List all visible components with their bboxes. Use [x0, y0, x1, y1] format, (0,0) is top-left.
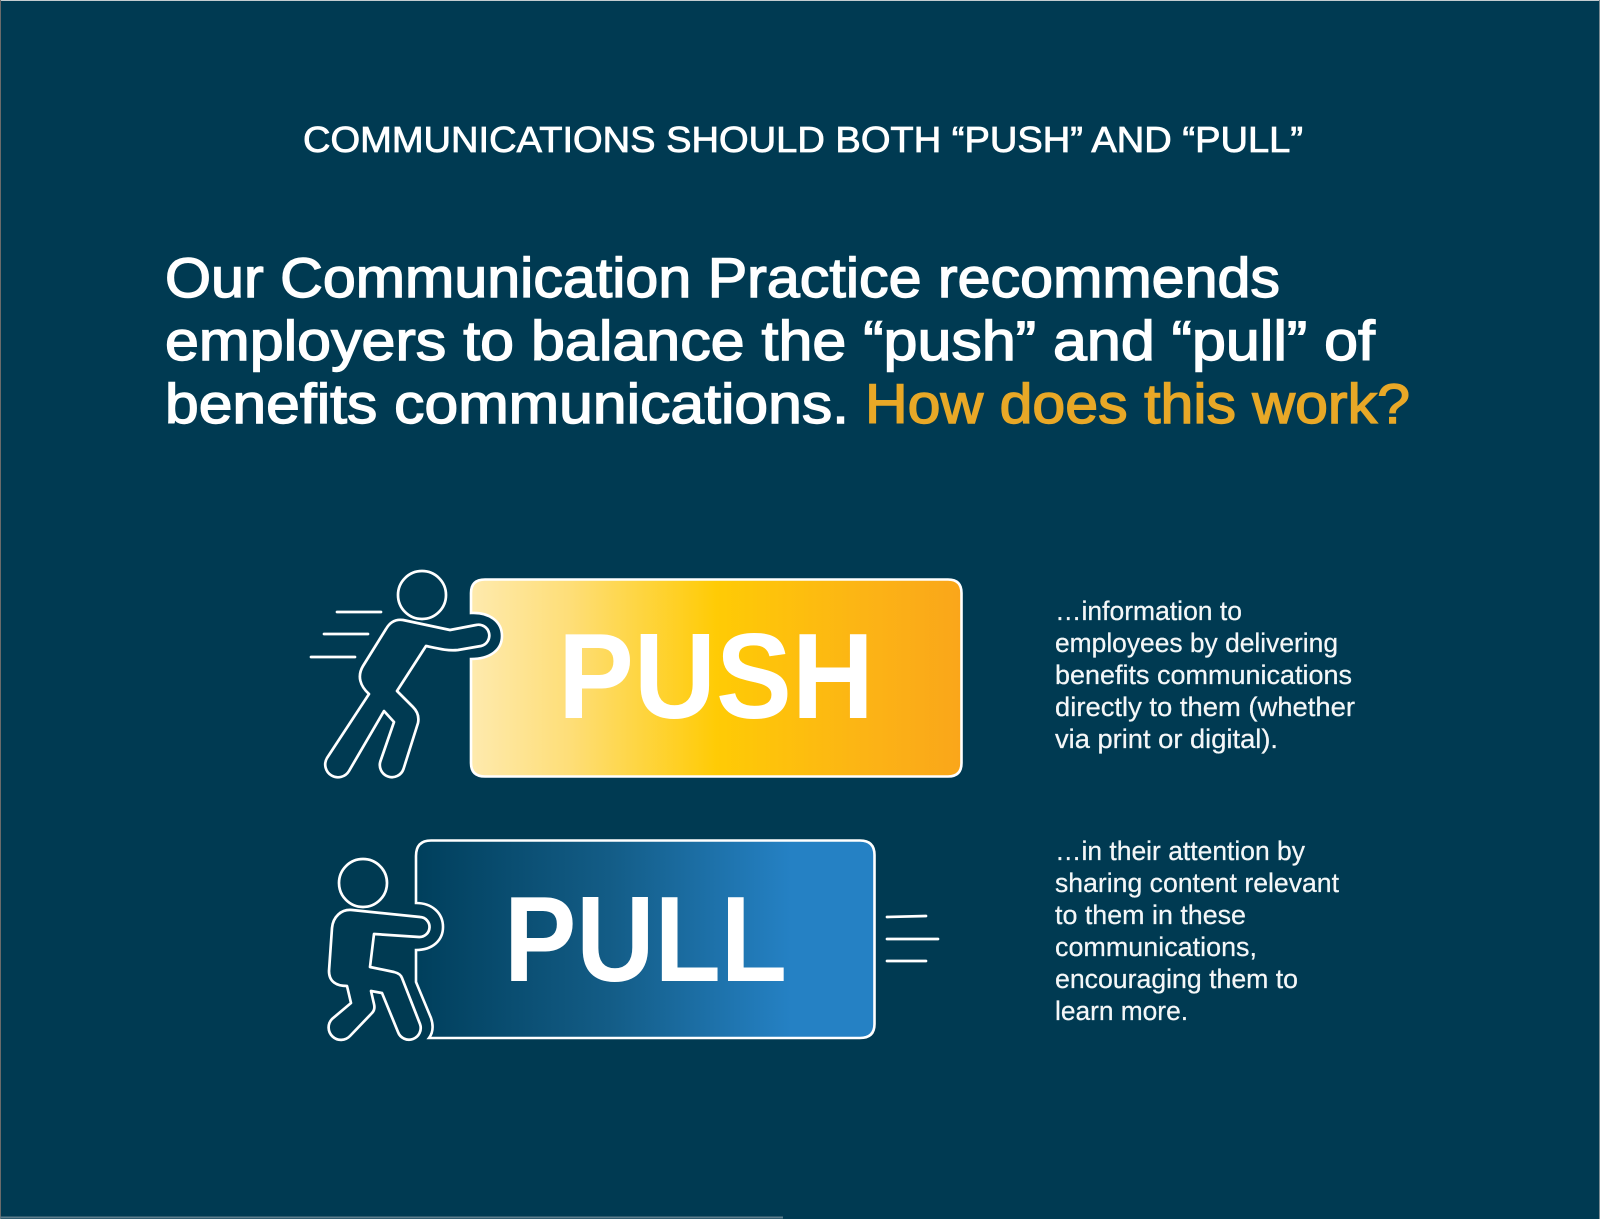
heading highlight: question: How does this work? — [865, 372, 1410, 435]
push label: PUSH — [558, 608, 874, 744]
pull button — [416, 840, 874, 1038]
push button — [471, 580, 962, 776]
push description: via print or digital). — [1055, 724, 1278, 754]
panel: pull — [329, 836, 1339, 1040]
pull description — [1055, 836, 1339, 1026]
icon: speed lines beside pull button — [887, 916, 938, 961]
push description: employees by delivering — [1055, 628, 1338, 658]
heading: recommendation: employers to balance the “push” and “pull” of — [165, 309, 1375, 372]
pull description: to them in these — [1055, 900, 1246, 930]
push description: directly to them (whether — [1055, 692, 1355, 722]
pull description: sharing content relevant — [1055, 868, 1339, 898]
push description: benefits communications — [1055, 660, 1352, 690]
pull description: learn more. — [1055, 996, 1188, 1026]
pull description: …in their attention by — [1055, 836, 1305, 866]
icon: pushing figure — [325, 571, 489, 777]
panel: push — [311, 571, 1355, 777]
heading: recommendation: benefits communications. — [165, 372, 849, 435]
icon: speed lines behind pushing figure — [311, 612, 381, 657]
title: COMMUNICATIONS SHOULD BOTH “PUSH” AND “PULL” — [303, 119, 1303, 160]
pull label: PULL — [504, 871, 787, 1007]
heading: recommendation: Our Communication Practice recommends — [165, 246, 1280, 309]
heading: recommendation — [165, 246, 1410, 435]
pull description: communications, — [1055, 932, 1257, 962]
push description: …information to — [1055, 596, 1242, 626]
push description — [1055, 596, 1355, 754]
pull description: encouraging them to — [1055, 964, 1298, 994]
icon: pulling figure — [329, 859, 430, 1040]
